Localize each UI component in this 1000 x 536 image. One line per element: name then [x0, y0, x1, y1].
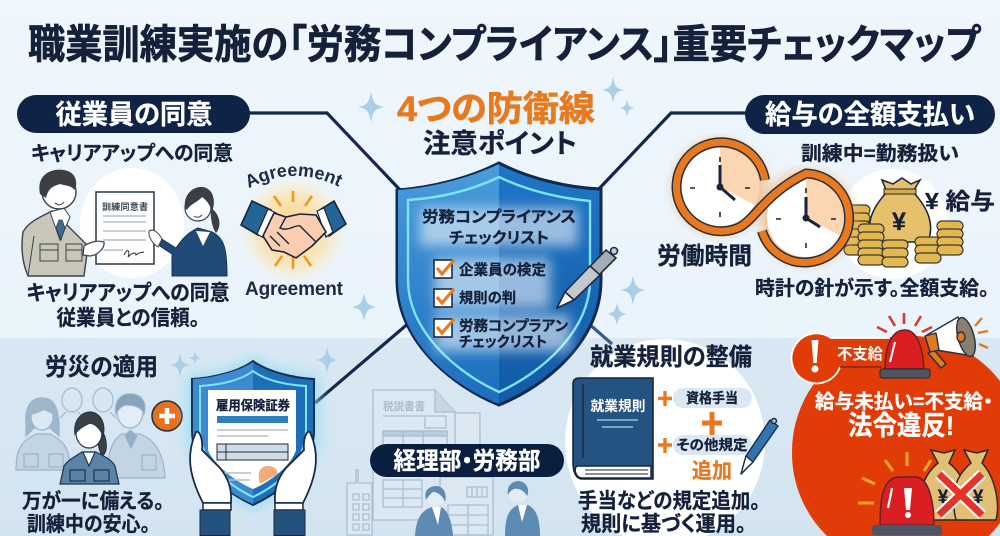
hands	[190, 432, 231, 503]
background documents, people, building: 税説書書	[383, 399, 425, 413]
icon: crossed-out money bags: ¥	[973, 487, 984, 508]
caption	[26, 282, 230, 330]
icon: siren with exclamation	[858, 452, 942, 536]
panel: compliance shield checklist	[397, 163, 618, 405]
caption: 従業員との信頼。	[56, 307, 200, 330]
added items	[658, 388, 752, 483]
check items: チェックリスト	[459, 334, 547, 351]
pill heading: employee consent: 従業員の同意	[56, 100, 212, 130]
checklist heading	[422, 208, 576, 247]
background documents, people, building	[347, 390, 540, 536]
sparkles	[170, 77, 646, 377]
checklist heading: 労務コンプライアンス	[422, 208, 576, 226]
connector lines to shield	[245, 113, 750, 403]
icon: siren	[877, 313, 932, 378]
caption: 手当などの規定追加。	[578, 490, 760, 513]
woman	[415, 507, 453, 536]
badge: non-payment: 不支給	[837, 345, 883, 363]
panel: non-payment warning	[792, 313, 1000, 536]
pill heading	[370, 444, 564, 477]
label: yen salary: ¥ 給与	[925, 188, 995, 214]
icon: infinity clocks	[664, 131, 863, 274]
icon: blue pen	[741, 418, 778, 474]
subheading: 訓練中=勤務扱い	[801, 143, 959, 165]
icon: handshake with Agreement: Agreement	[248, 166, 342, 188]
icon: insurance shield held by hands	[186, 356, 320, 536]
pill heading: full salary payment	[745, 95, 995, 134]
caption	[578, 490, 760, 536]
label: working hours: 労働時間	[657, 243, 752, 270]
panel: accounting and labor departments	[347, 390, 564, 536]
illustration: man and woman with consent document	[22, 168, 227, 278]
panel: employee consent	[17, 95, 347, 330]
front woman	[60, 412, 119, 484]
center heading: four lines of defense: 注意ポイント	[423, 129, 577, 159]
added items: 資格手当	[686, 390, 738, 406]
red circle	[792, 336, 1000, 536]
caption: 時計の針が示す。全額支給。	[755, 276, 989, 300]
subheading: キャリアアップへの同意	[31, 142, 233, 165]
illustration: man and woman with consent document: 訓練同意書	[102, 201, 148, 212]
icon: rule book: 就業規則	[590, 398, 646, 414]
icon: orange plus	[152, 401, 182, 431]
check items	[434, 260, 568, 351]
man	[505, 505, 540, 536]
panel: full salary payment	[657, 95, 995, 300]
back man	[107, 394, 165, 478]
warning text	[815, 391, 993, 441]
icon: megaphone	[925, 316, 988, 368]
panel: work rules	[565, 339, 778, 536]
caption	[22, 489, 164, 536]
icon: handshake with Agreement	[240, 166, 347, 300]
icon: insurance shield held by hands: 雇用保険証券	[216, 398, 290, 413]
illustration: workers	[16, 388, 165, 484]
center heading: four lines of defense: 4つの防衛線	[397, 90, 595, 129]
badge: non-payment	[792, 333, 890, 383]
icon: money bag and coins	[838, 169, 963, 279]
icon: rule book	[573, 378, 653, 479]
check items: 規則の判	[459, 290, 516, 307]
center heading: four lines of defense	[397, 90, 595, 159]
checklist heading: チェックリスト	[449, 229, 549, 247]
icon: pen	[557, 248, 618, 308]
caption: キャリアアップへの同意	[26, 282, 230, 305]
caption: 万が一に備える。	[22, 489, 164, 513]
added items: 追加	[692, 460, 732, 483]
check items: 労務コンプラアン	[459, 318, 568, 335]
warning text: 給与未払い=不支給・	[815, 391, 993, 413]
pill heading: 経理部・労務部	[394, 448, 540, 475]
caption: 規則に基づく運用。	[581, 513, 746, 536]
pill heading: employee consent	[17, 95, 250, 133]
added items: その他規定	[676, 437, 748, 453]
panel: workers accident coverage	[16, 354, 320, 536]
warning text: 法令違反!	[848, 411, 954, 441]
icon: crossed-out money bags: ¥	[938, 487, 949, 508]
icon: crossed-out money bags	[921, 450, 997, 520]
heading: 労災の適用	[45, 354, 158, 381]
check items: 企業員の検定	[459, 261, 546, 279]
back woman	[16, 398, 70, 470]
back outlines	[60, 388, 116, 418]
white backdrop	[565, 339, 765, 536]
pill heading: full salary payment: 給与の全額支払い	[765, 100, 975, 130]
icon: handshake with Agreement: Agreement	[245, 279, 344, 300]
heading: 就業規則の整備	[590, 344, 752, 371]
soft glow behind text	[420, 208, 578, 351]
icon: money bag and coins: ¥	[892, 208, 906, 236]
caption: 訓練中の安心。	[27, 513, 150, 536]
